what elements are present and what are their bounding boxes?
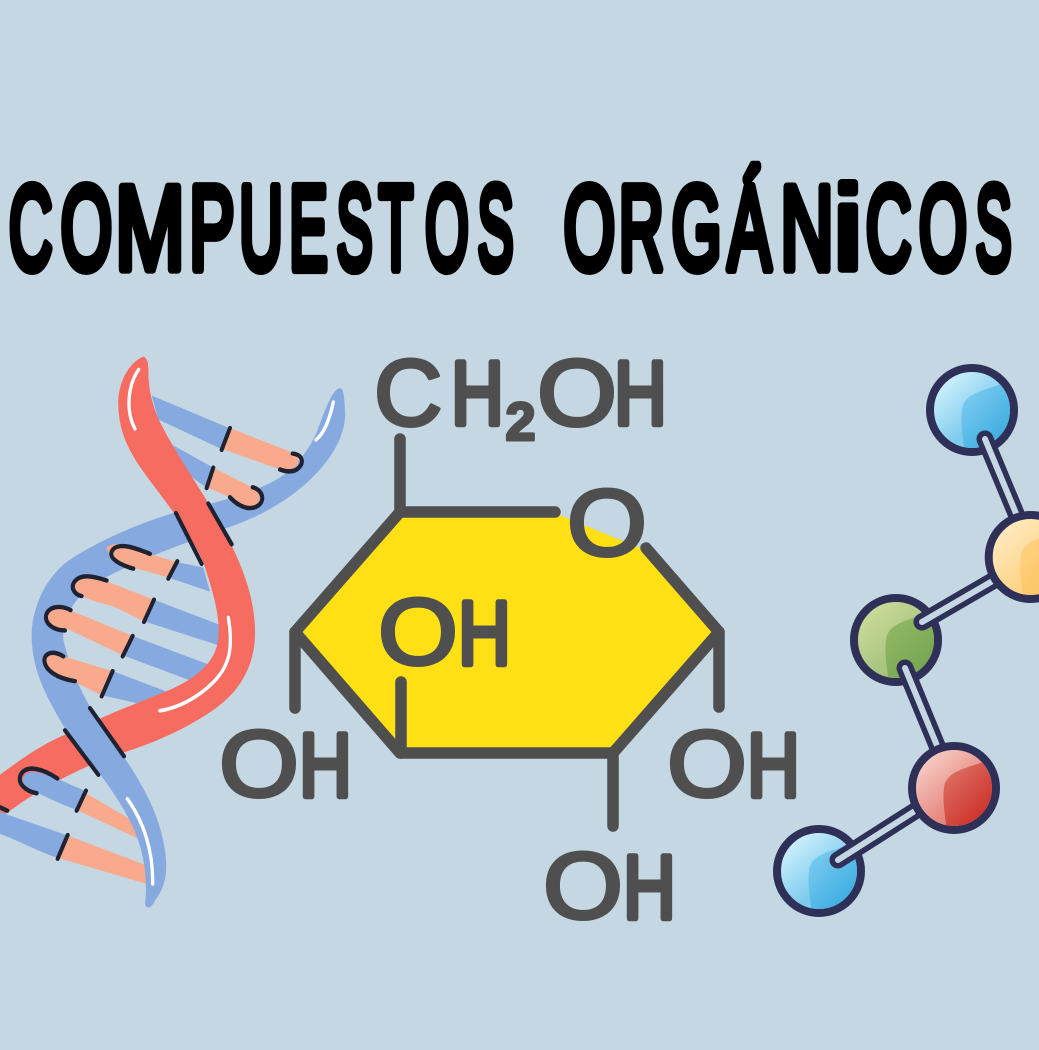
DNA lower blue rungs — [0, 772, 86, 858]
label CH2OH: H — [451, 344, 504, 444]
title: R — [619, 162, 664, 295]
ring bonds — [295, 439, 719, 826]
title: T — [379, 162, 413, 295]
title: C — [9, 162, 52, 294]
title: i — [833, 162, 863, 295]
DNA blue strand — [32, 388, 345, 907]
title: G — [672, 163, 722, 295]
label CH2OH: 2 — [506, 392, 536, 452]
label OH inner: H — [458, 584, 511, 684]
chemical structure: glucose ring — [219, 340, 800, 938]
title: Á — [728, 162, 771, 295]
label OH inner — [378, 579, 511, 684]
label CH2OH: O — [537, 340, 617, 445]
atom: orange — [989, 515, 1039, 602]
title: C — [866, 163, 912, 295]
label OH bottom — [543, 833, 676, 938]
icon: DNA double helix — [0, 357, 345, 907]
title: S — [976, 161, 1011, 295]
title: S — [337, 161, 372, 295]
ring oxygen: O — [567, 470, 647, 575]
atom: blue top — [930, 368, 1017, 455]
label OH right: H — [747, 716, 800, 816]
label OH left — [219, 711, 352, 816]
atom: blue bottom — [777, 829, 864, 916]
title: S — [478, 161, 513, 295]
DNA red strand upper overlap — [118, 356, 255, 696]
label OH inner: O — [378, 579, 458, 684]
title: N — [780, 161, 834, 294]
label OH right: O — [667, 711, 747, 816]
yellow ring fill — [296, 513, 719, 753]
DNA red strand — [0, 357, 255, 817]
DNA black outlines — [0, 428, 302, 859]
title: O — [61, 163, 112, 295]
title: O — [425, 161, 469, 295]
title: P — [189, 161, 235, 295]
label OH right — [667, 711, 800, 816]
DNA white highlights — [127, 370, 333, 884]
label CH2OH: C — [374, 340, 442, 445]
atom: red — [912, 746, 999, 833]
DNA salmon rungs — [45, 428, 299, 695]
label CH2OH — [374, 340, 667, 452]
molecule bonds — [838, 439, 1025, 860]
label OH left: H — [299, 716, 352, 816]
DNA blue rungs behind strands — [102, 396, 231, 704]
title: O — [564, 163, 615, 295]
title — [9, 161, 1011, 295]
title: M — [115, 161, 185, 294]
icon: ball and stick molecule — [777, 368, 1039, 916]
atom: green — [854, 598, 941, 685]
label CH2OH: H — [614, 344, 667, 444]
label OH bottom: O — [543, 833, 623, 938]
title: U — [239, 162, 283, 294]
title: E — [289, 161, 328, 294]
label OH left: O — [219, 711, 299, 816]
DNA lower salmon rungs — [58, 793, 147, 884]
label OH bottom: H — [623, 838, 676, 938]
title: O — [919, 162, 967, 295]
